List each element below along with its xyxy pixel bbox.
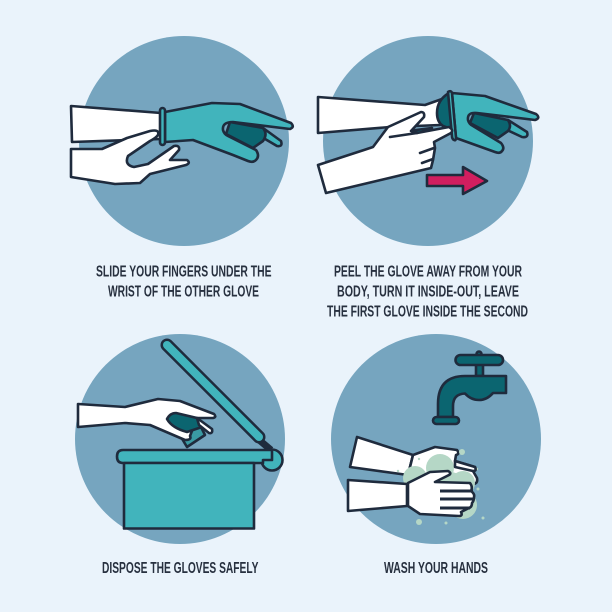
upper fingers over foam — [455, 461, 476, 471]
panel: slide fingers under wrist — [71, 36, 293, 300]
bin lid — [167, 345, 259, 437]
faucet handle — [456, 355, 503, 365]
caption: SLIDE YOUR FINGERS UNDER THE — [96, 264, 272, 280]
glove inner palm — [226, 122, 266, 148]
caption — [327, 264, 528, 320]
sliver under fingers — [408, 128, 432, 133]
glove cuff — [160, 108, 165, 145]
bin hinge pin — [258, 439, 271, 450]
soap foam — [397, 449, 484, 525]
caption: WRIST OF THE OTHER GLOVE — [108, 284, 259, 300]
glove inner palm — [470, 113, 510, 138]
faucet base — [433, 417, 459, 424]
faucet — [433, 352, 506, 424]
hand holding glove — [78, 399, 215, 440]
bin hinge — [262, 450, 282, 470]
bin lid fill — [167, 345, 259, 437]
inside-out glove interior — [437, 93, 454, 130]
hand finger lines — [390, 133, 434, 163]
sleeve of gloved arm — [318, 97, 442, 133]
bin body — [124, 463, 254, 528]
glove cuff — [448, 91, 456, 140]
small glove finger — [260, 128, 282, 146]
background circle — [79, 36, 289, 246]
background circle — [323, 36, 533, 246]
caption: WASH YOUR HANDS — [384, 560, 488, 577]
hand peeling glove — [318, 112, 452, 193]
upper sleeve — [350, 437, 413, 475]
peeled glove — [452, 93, 538, 153]
sleeve of gloved arm — [71, 106, 161, 142]
faucet body — [438, 376, 506, 417]
lower hand — [408, 471, 474, 516]
panel: dispose gloves — [75, 334, 285, 577]
lower sleeve — [348, 480, 407, 511]
small finger — [197, 418, 212, 433]
finger lines — [440, 491, 474, 508]
upper hand — [408, 447, 477, 490]
panel: wash hands — [331, 334, 541, 577]
caption — [96, 264, 272, 300]
background circle — [331, 334, 541, 544]
faucet knob — [476, 352, 482, 356]
crumpled glove dark — [167, 413, 202, 432]
bare hand sliding under glove — [71, 130, 189, 184]
bin rim — [117, 450, 272, 463]
background circle — [75, 334, 285, 544]
faucet stem — [476, 362, 483, 376]
pink arrow — [427, 167, 487, 194]
glove — [165, 103, 293, 162]
caption: BODY, TURN IT INSIDE-OUT, LEAVE — [337, 284, 519, 300]
caption: DISPOSE THE GLOVES SAFELY — [102, 560, 259, 577]
panel: peel the glove away — [318, 36, 538, 320]
small glove finger — [505, 120, 527, 137]
crumpled glove — [181, 419, 205, 447]
